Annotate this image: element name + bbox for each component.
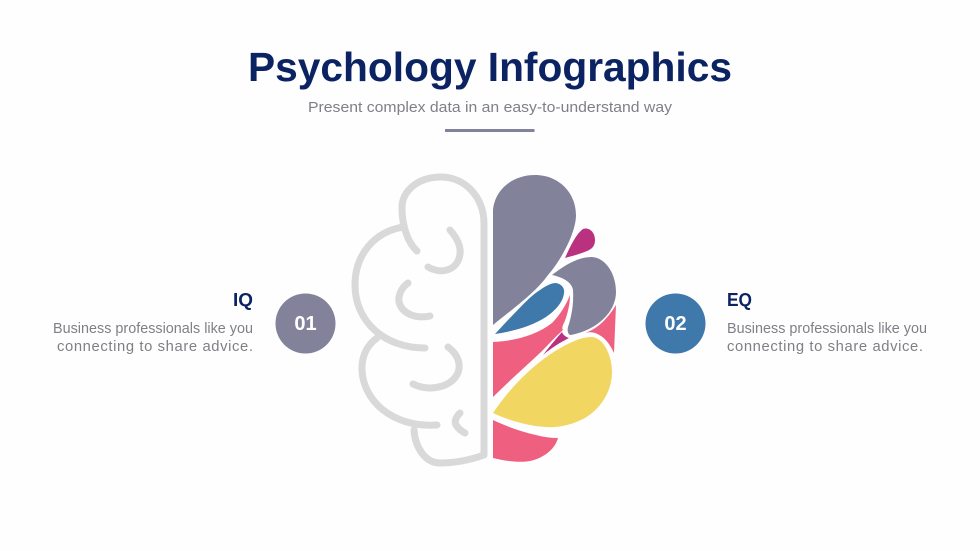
petal: small gray [552,257,616,335]
petal: pink middle [493,295,570,397]
petal: pink bottom [493,420,558,462]
title underline [445,129,534,132]
left hemisphere outline [355,177,484,463]
badge 02: 02 [664,313,687,335]
EQ description: connecting to share advice. [727,339,923,355]
badge 01 [276,294,336,354]
IQ heading: IQ [233,290,253,310]
petal: blue [495,283,564,334]
petal: magenta drop [565,229,595,258]
brain illustration [355,175,616,463]
petal: pink right [584,305,616,353]
subtitle: Present complex data in an easy-to-understand way [308,99,673,116]
petal: magenta sliver [543,332,569,355]
EQ heading: EQ [727,290,752,310]
left block: IQ [53,290,336,355]
EQ description: Business professionals like you [727,321,927,337]
IQ description: Business professionals like you [53,321,253,337]
petal: yellow [493,337,612,427]
badge 02 [646,294,706,354]
right block: EQ [646,290,931,355]
IQ description: connecting to share advice. [57,339,253,355]
petal: large gray [493,175,576,325]
title: Psychology Infographics [248,44,732,90]
badge 01: 01 [294,313,317,335]
